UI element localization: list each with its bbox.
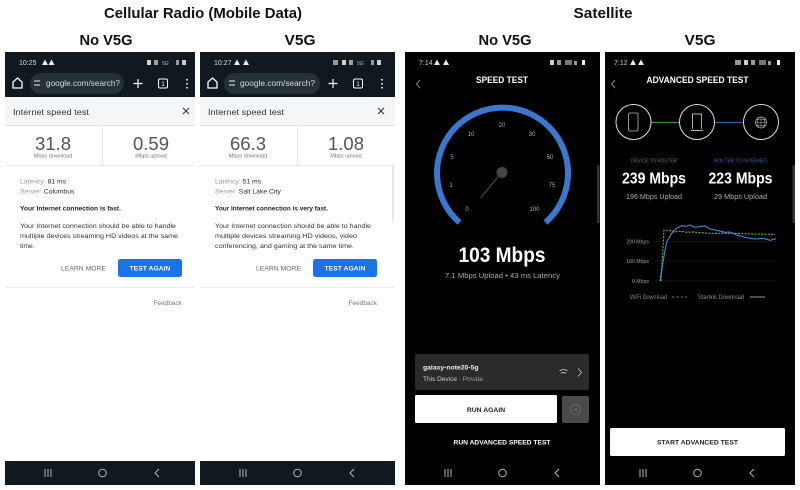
result text: multiple devices streaming HD videos at the same [20, 233, 178, 240]
navigation bar [445, 469, 559, 477]
stat: router to internet: 29 Mbps Upload [714, 192, 767, 201]
line chart: 200 Mbps [626, 240, 649, 246]
stat: download: Mbps download [229, 154, 267, 160]
browser toolbar [5, 52, 195, 97]
heading: V5G satellite: V5G [684, 32, 716, 49]
panel: satellite no V5G phone [405, 52, 600, 485]
heading: No V5G satellite: No V5G [478, 32, 532, 49]
line chart: 100 Mbps [626, 259, 649, 265]
result text: time. [20, 243, 35, 250]
stat: upload: 1.08 [328, 133, 364, 154]
button: start advanced test [610, 428, 785, 456]
connection diagram [616, 104, 778, 140]
icon: back chevron [416, 80, 420, 88]
line chart [626, 225, 776, 285]
stat: device to router [622, 158, 686, 201]
scrollbar [792, 165, 795, 223]
link: learn more: LEARN MORE [61, 266, 106, 272]
gauge: 20 [499, 123, 506, 129]
link: feedback: Feedback [348, 300, 378, 307]
button: test again [118, 259, 182, 277]
button: run again [415, 395, 557, 423]
result text: Your Internet connection should be able to handle [215, 223, 371, 230]
stat: device to router: DEVICE TO ROUTER [631, 158, 677, 164]
infobar: Internet speed test: Internet speed test [13, 107, 90, 117]
gauge: 0 [465, 207, 469, 213]
latency and server: Server: Columbus [20, 188, 75, 196]
stat: upload: 0.59 [133, 133, 169, 154]
result text: Your Internet connection should be able to handle [20, 223, 176, 230]
button: run again: RUN AGAIN [467, 407, 505, 414]
browser toolbar: 1 [356, 82, 360, 88]
chart legend: WiFi Download [630, 295, 667, 301]
result: 103 Mbps: 103 Mbps [458, 244, 546, 267]
browser toolbar: 1 [161, 82, 165, 88]
gauge: 30 [529, 132, 536, 138]
stat: device to router: 196 Mbps Upload [626, 192, 682, 201]
status bar: 7:12 [614, 60, 628, 67]
gauge: 10 [468, 132, 475, 138]
icon: globe [744, 104, 778, 140]
infobar: Internet speed test: Internet speed test [208, 107, 285, 117]
chart legend: Starlink Download [698, 295, 744, 301]
title: speed test: SPEED TEST [476, 75, 528, 85]
result text: Your Internet connection is very fast. [215, 206, 328, 212]
navigation bar [640, 469, 754, 477]
gauge: 5 [450, 155, 454, 161]
browser toolbar: 10:27 [214, 60, 232, 67]
stat: router to internet: ROUTER TO INTERNET [714, 158, 767, 164]
latency and server: Latency: 51 ms [215, 178, 262, 186]
gauge: 75 [549, 183, 556, 189]
gauge: 100 [529, 207, 540, 213]
heading: Cellular Radio (Mobile Data): Cellular Radio (Mobile Data) [104, 5, 302, 22]
heading: Satellite: Satellite [574, 5, 632, 22]
title: advanced speed test: ADVANCED SPEED TEST [646, 75, 749, 85]
heading: V5G cellular: V5G [284, 32, 316, 49]
latency and server: Latency: 81 ms [20, 178, 67, 186]
browser toolbar: 5G [357, 61, 364, 67]
stat: upload: Mbps upload [135, 154, 167, 160]
gauge: 1 [449, 183, 453, 189]
status bar [419, 60, 585, 67]
chart legend [630, 295, 765, 301]
browser toolbar: google.com/search? [46, 78, 120, 88]
latency and server: Server: Salt Lake City [215, 188, 281, 196]
status bar: 7:14 [419, 60, 433, 67]
stat: download: 66.3 [230, 133, 266, 154]
result text: conferencing, and gaming at the same time. [215, 243, 354, 250]
line chart: 0 Mbps [632, 279, 649, 285]
browser toolbar: google.com/search? [240, 78, 315, 88]
result text: multiple devices streaming HD videos, video [215, 233, 357, 240]
panel: cellular V5G phone [200, 52, 395, 485]
icon: router [680, 104, 714, 140]
link: feedback: Feedback [153, 300, 183, 307]
navigation bar [200, 461, 395, 485]
link: learn more: LEARN MORE [256, 266, 301, 272]
icon: phone [616, 104, 651, 140]
link: run advanced speed test: RUN ADVANCED SPEED TEST [454, 440, 551, 446]
gauge [437, 108, 568, 222]
stat: router to internet [708, 158, 773, 201]
stat: download: 31.8 [35, 133, 71, 154]
result text: Your Internet connection is fast. [20, 206, 121, 212]
infobar: Internet speed test [200, 97, 395, 126]
infobar: Internet speed test [5, 97, 195, 126]
panel: satellite V5G phone [605, 52, 795, 485]
stat: device to router: 239 Mbps [622, 170, 686, 188]
button: test again: TEST AGAIN [130, 266, 171, 272]
device card [415, 354, 589, 390]
result text [20, 206, 178, 250]
upload and latency: 7.1 Mbps Upload • 43 ms Latency [445, 271, 560, 280]
latency and server [215, 178, 281, 196]
button: test again: TEST AGAIN [325, 266, 366, 272]
navigation bar [5, 461, 195, 485]
button: test again [313, 259, 377, 277]
status bar [614, 60, 780, 67]
stat: router to internet: 223 Mbps [708, 170, 773, 188]
button: start advanced test: START ADVANCED TEST [657, 440, 739, 446]
browser toolbar [200, 52, 395, 97]
panel: cellular no V5G phone [5, 52, 195, 485]
browser toolbar: 5G [162, 61, 169, 67]
browser toolbar: 10:25 [19, 60, 37, 67]
device card: This Device · Private [423, 376, 483, 383]
scrollbar [597, 165, 600, 223]
device card: galaxy-note20-5g [423, 364, 479, 372]
icon: back chevron [612, 80, 615, 88]
stat: upload: Mbps upload [330, 154, 362, 160]
heading: No V5G cellular: No V5G [80, 32, 132, 49]
result text [215, 206, 371, 250]
gauge: 50 [547, 155, 554, 161]
stat: download: Mbps download [34, 154, 72, 160]
button: share icon [562, 396, 589, 423]
latency and server [20, 178, 75, 196]
